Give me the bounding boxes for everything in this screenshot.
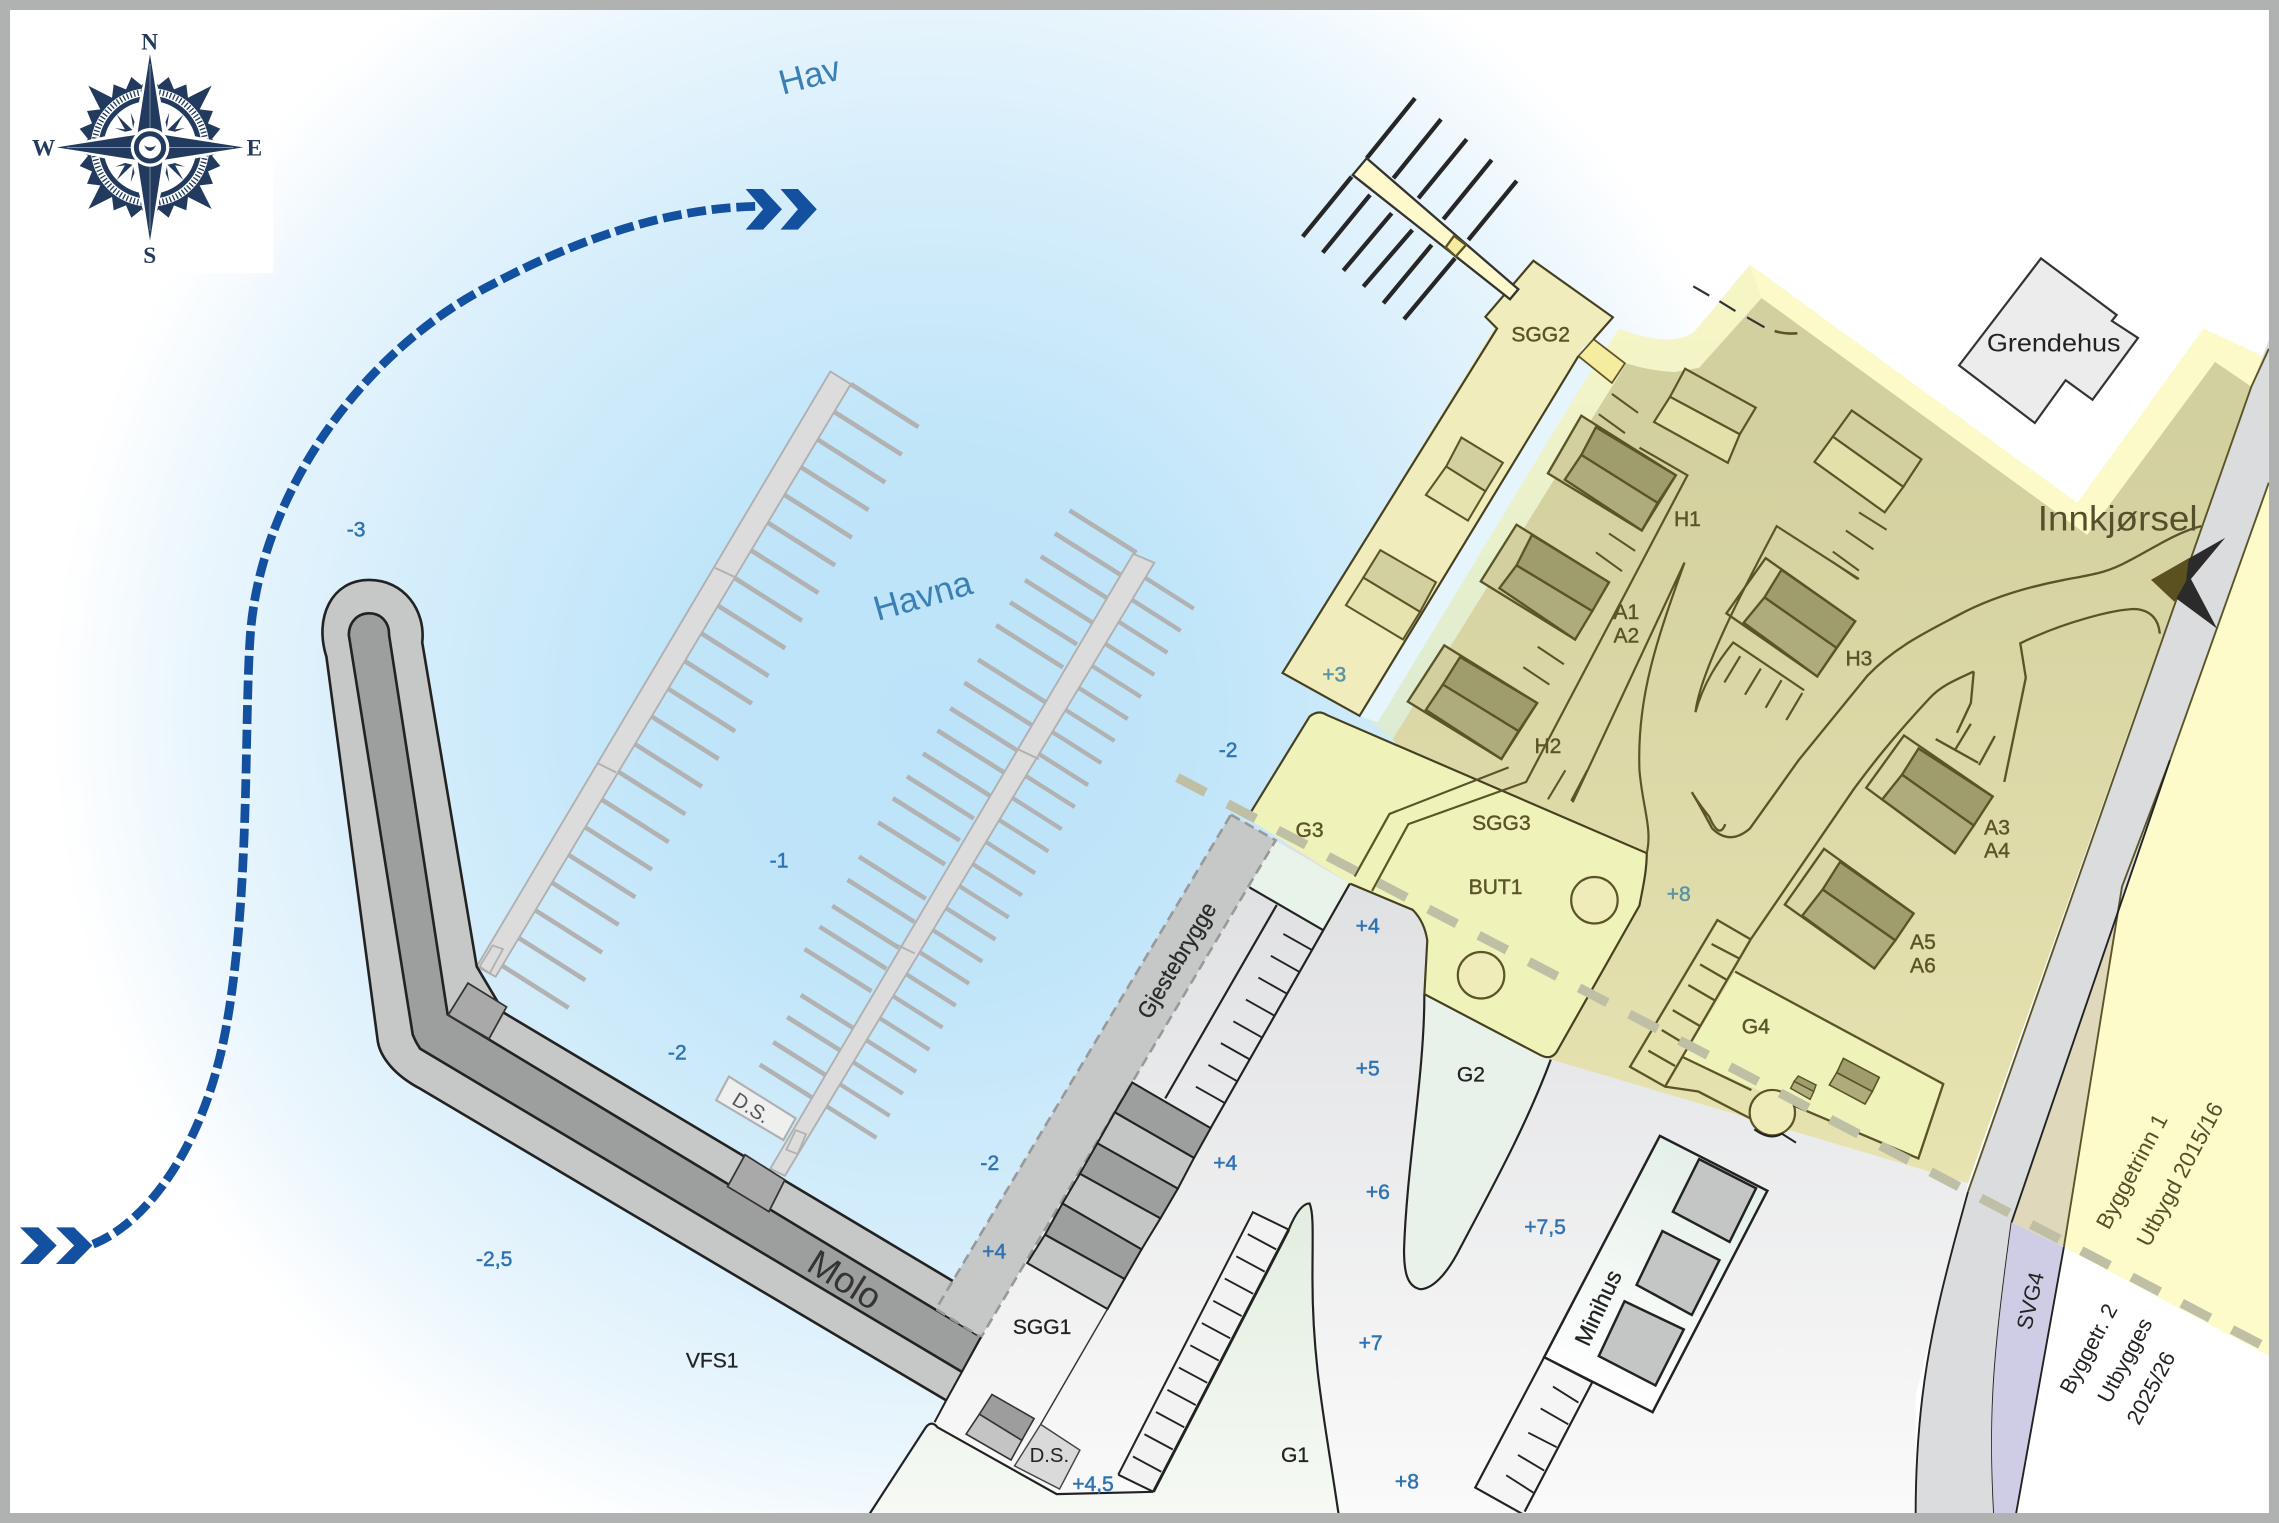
icon: short parking tick marks: [1523, 394, 1887, 801]
icon: broken line north of olive zone: [1693, 286, 1764, 327]
panel: main road: [1916, 340, 2269, 1514]
text: plot codes on yellow land: A5: [1910, 931, 1936, 954]
text: water depth labels: -1: [770, 850, 788, 873]
text: plot codes on yellow land: A4: [1984, 840, 2010, 863]
text: plot codes on gray land: [686, 1063, 1485, 1467]
panel: G1 green area: [869, 1203, 1339, 1514]
text: plot codes on yellow land: H1: [1674, 508, 1701, 531]
text: plot codes on gray land: VFS1: [686, 1350, 739, 1373]
marina pier 2: [760, 510, 1194, 1176]
text: Byggetrinn 2 note: 2025/26: [2121, 1347, 2180, 1429]
panel: parking lot north 1: [1654, 369, 1756, 463]
text: land elevation labels: +5: [1356, 1058, 1380, 1081]
panel: Minihus plot: [1544, 1136, 1767, 1412]
text: plot codes on yellow land: G4: [1742, 1015, 1770, 1038]
text: plot codes on yellow land: [1295, 324, 2010, 1038]
panel: narrow inlet: [1359, 356, 1596, 722]
panel: striped boat storage: [1027, 1083, 1211, 1309]
breakwater: Molo: Molo: [801, 1241, 889, 1318]
text: plot codes on yellow land: BUT1: [1469, 876, 1523, 899]
text: plot codes on yellow land: H3: [1845, 648, 1872, 671]
text: Byggetrinn 1 note: Byggetrinn 1: [2091, 1110, 2173, 1233]
text: plot codes on yellow land: A1: [1614, 601, 1639, 624]
compass rose: S: [143, 243, 156, 269]
text: land elevation labels: +4: [982, 1241, 1006, 1264]
text: land elevation labels: +7,5: [1524, 1216, 1566, 1239]
land area (gray zone): [869, 814, 1968, 1514]
panel: parking and path by G4: [1630, 920, 1751, 1118]
panel: G4 area: [1683, 972, 1943, 1158]
panel: outer jetty with fingers: [1303, 98, 1518, 319]
panel: tan verge: [2012, 760, 2170, 1247]
divider: construction phase boundary: [1177, 778, 2269, 1349]
text: plot codes on yellow land: SGG3: [1472, 812, 1531, 835]
panel: Gjestebrygge guest pier: Gjestebrygge: [1132, 898, 1221, 1023]
arrow: entrance chevron: [2151, 538, 2225, 629]
panel: G2 green area: [1404, 994, 1551, 1289]
arrow: dashed sailing route into harbour: [20, 189, 817, 1264]
panel: Gjestebrygge guest pier: [936, 815, 1276, 1337]
panel: Grendehus community house: Grendehus: [1987, 331, 2121, 358]
text: plot codes on yellow land: G3: [1295, 819, 1324, 842]
text: Byggetrinn 2 note: Byggetr. 2: [2054, 1299, 2122, 1398]
label: D.S. floating dock: D.S.: [728, 1089, 773, 1128]
panel: olive built-up zone: [1392, 298, 2251, 1183]
panel: building H3: [1726, 558, 1855, 676]
panel: parking below Minihus: [1475, 1357, 1592, 1514]
panel: SVG4 lavender strip: SVG4: [2012, 1270, 2049, 1332]
text: land elevation labels: +8: [1395, 1470, 1419, 1493]
icon: main access road curves: [1692, 526, 2201, 939]
icon: road lines through H1 fence and H2 access: [1355, 448, 1687, 891]
panel: Minihus plot: Minihus: [1569, 1266, 1627, 1350]
text: water depth labels: -2: [668, 1042, 687, 1065]
text: plot codes on yellow land: SGG2: [1511, 324, 1570, 347]
text: land elevation labels: +4,5: [1072, 1473, 1114, 1496]
panel: pale yellow margin of Byggetrinn 1: [1365, 265, 2269, 740]
text: water depth labels: -2,5: [476, 1248, 512, 1271]
text: land elevation labels: +4: [1356, 915, 1380, 938]
icon: road lines through H3: [1695, 526, 1859, 720]
compass rose: N: [141, 29, 158, 55]
panel: building row 2: [1481, 525, 1609, 640]
heading: Innkjørsel: Innkjørsel: [2038, 500, 2198, 539]
compass rose: W: [32, 136, 55, 162]
compass rose: E: [247, 136, 262, 162]
text: land elevation labels: [982, 664, 1691, 1496]
text: plot codes on gray land: SGG1: [1013, 1316, 1071, 1339]
text: water depth labels: [347, 518, 1238, 1271]
panel: building row 3: [1408, 645, 1537, 759]
panel: parking by Gjestebrygge: [1165, 883, 1350, 1128]
panel: SGG2 quay: [1283, 261, 1625, 716]
panel: SGG1 quay details: [935, 1309, 1108, 1489]
text: water depth labels: -2: [1219, 739, 1238, 762]
icon: roundabouts: [1458, 877, 1618, 999]
marina pier 1: [477, 371, 918, 1008]
icon: curved line end north: [1775, 331, 1797, 334]
text: Byggetrinn 2 note: [2054, 1299, 2180, 1429]
panel: right-hand field Byggetrinn 1: [2064, 483, 2269, 1356]
text: Hav: Hav: [775, 49, 845, 103]
text: Byggetrinn 2 note: Utbygges: [2092, 1314, 2157, 1407]
panel: pale green strip by G3: [1249, 840, 1350, 930]
text: water depth labels: -3: [347, 518, 365, 541]
text: land elevation labels: +8: [1667, 883, 1691, 906]
text: water depth labels: -2: [980, 1152, 999, 1175]
breakwater: Molo: [322, 580, 1003, 1400]
panel: SGG1 quay details: D.S.: [1030, 1445, 1069, 1467]
panel: building A5 A6: [1785, 849, 1914, 968]
text: land elevation labels: +7: [1359, 1332, 1383, 1355]
panel: parking lot north 2: [1814, 410, 1921, 512]
text: land elevation labels: +6: [1366, 1181, 1390, 1204]
text: land elevation labels: +3: [1322, 664, 1346, 687]
text: plot codes on yellow land: H2: [1534, 735, 1561, 758]
panel: SVG4 lavender strip: [1992, 1222, 2064, 1514]
text: plot codes on gray land: G1: [1281, 1444, 1309, 1467]
compass rose: [9, 9, 273, 273]
text: land elevation labels: +4: [1213, 1152, 1238, 1175]
text: plot codes on yellow land: A3: [1984, 816, 2010, 839]
panel: building A1 A2 H1: [1548, 416, 1676, 531]
text: Byggetrinn 1 note: Utbygd 2015/16: [2132, 1098, 2228, 1250]
text: Havna: Havna: [869, 563, 977, 629]
panel: Grendehus community house: [1959, 258, 2138, 423]
text: plot codes on yellow land: A6: [1910, 954, 1936, 977]
panel: G3 / SGG3 / BUT1 commercial area: [1247, 713, 1647, 1057]
text: plot codes on gray land: G2: [1457, 1063, 1485, 1086]
label: D.S. floating dock: [716, 1077, 796, 1140]
panel: building A3 A4: [1866, 735, 1993, 853]
text: plot codes on yellow land: A2: [1614, 624, 1639, 647]
panel: parking along G1: [1118, 1212, 1289, 1492]
